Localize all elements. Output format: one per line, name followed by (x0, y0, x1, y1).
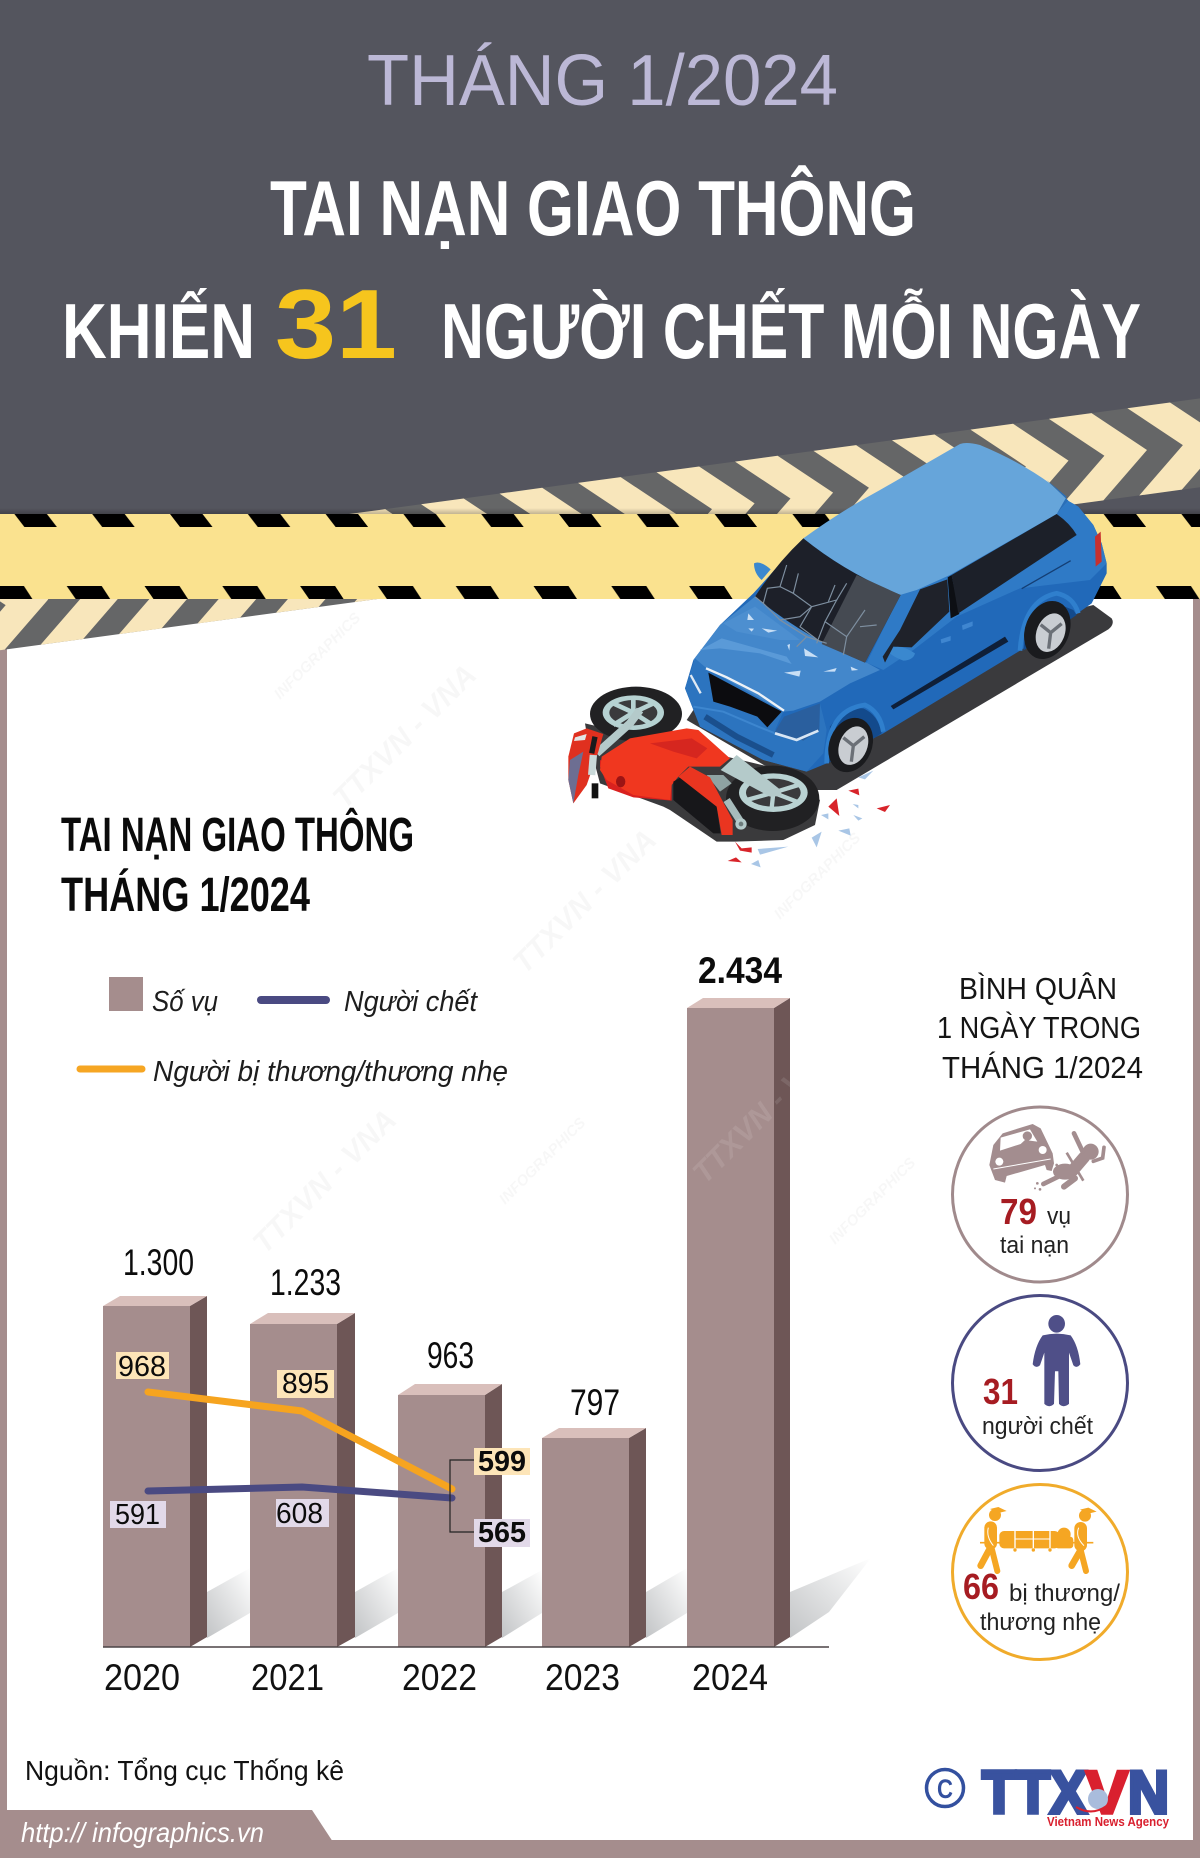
illustration: blue car (685, 443, 1113, 790)
bar value labels: 2.434 (698, 950, 782, 991)
stat circle: accidents: tai nạn (1000, 1232, 1069, 1259)
line data labels (110, 1351, 530, 1549)
year axis labels: 2024 (692, 1657, 768, 1698)
stat circle: accidents: vụ (1047, 1203, 1071, 1230)
footer tab (0, 1810, 333, 1842)
icon: stretcher (980, 1507, 1097, 1571)
source: Nguồn: Tổng cục Thống kê (25, 1755, 344, 1786)
faint watermarks: INFOGRAPHICS (496, 1114, 589, 1208)
faint watermarks (247, 609, 919, 1260)
header background (0, 0, 1200, 520)
faint watermarks: INFOGRAPHICS (826, 1154, 919, 1248)
chart title: TAI NẠN GIAO THÔNG (61, 807, 414, 862)
main title: line 2 (62, 269, 1141, 379)
bar shadows (207, 1558, 871, 1638)
icon: car hitting motorbike (989, 1124, 1104, 1191)
stat circle: accidents (952, 1107, 1128, 1282)
line data labels: 608 (276, 1498, 323, 1530)
year axis labels: 2022 (402, 1657, 477, 1698)
main title: line 2: KHIẾN (62, 287, 255, 375)
copyright mark (926, 1770, 964, 1806)
stat circle: deaths: 31 (983, 1371, 1018, 1412)
daily average heading: 1 NGÀY TRONG (937, 1010, 1141, 1045)
stat circle: deaths: người chết (982, 1413, 1093, 1440)
daily average heading: BÌNH QUÂN (959, 971, 1117, 1006)
bar 2022 (398, 1384, 502, 1647)
year axis labels: 2021 (251, 1657, 324, 1698)
illustration: fallen motorcycle and debris (568, 687, 890, 867)
stat circle: injured: thương nhẹ (980, 1609, 1101, 1636)
line data labels: 591 (115, 1499, 160, 1531)
logo TTXVN (982, 1759, 1169, 1829)
content panel frame (0, 590, 1200, 1858)
main title: line 2: 31 (275, 269, 397, 379)
legend (80, 977, 508, 1088)
faint watermarks: TTXVN - VNA (327, 658, 483, 815)
logo TTXVN: N (1128, 1759, 1169, 1826)
bar 2023 (542, 1428, 646, 1647)
year axis labels: 2020 (104, 1657, 180, 1698)
line data labels: 599 (478, 1446, 526, 1478)
line data labels: 565 (478, 1517, 526, 1549)
bar 2024: TTXVN - VNA (687, 1033, 843, 1190)
content panel white (7, 590, 1193, 1840)
legend: Số vụ (152, 986, 218, 1018)
bar 2021 (250, 1313, 355, 1647)
2022 connector (450, 1460, 474, 1532)
bar value labels: 1.300 (123, 1242, 194, 1283)
stat circle: accidents: 79 (1000, 1191, 1037, 1232)
year axis labels: 2023 (545, 1657, 620, 1698)
faint watermarks: TTXVN - VNA (507, 823, 663, 980)
faint watermarks: INFOGRAPHICS (771, 829, 864, 923)
bar value labels: 797 (570, 1382, 620, 1423)
logo TTXVN: Vietnam News Agency (1047, 1815, 1169, 1829)
legend: Người bị thương/thương nhẹ (153, 1056, 508, 1088)
warning tape band (0, 508, 1200, 599)
year axis labels (104, 1657, 768, 1698)
chart title: THÁNG 1/2024 (61, 868, 310, 922)
bar value labels: 963 (427, 1335, 474, 1376)
copyright mark: C (937, 1774, 953, 1804)
faint watermarks: TTXVN - VNA (247, 1103, 403, 1260)
line data labels: 968 (118, 1351, 166, 1383)
icon: person (1033, 1315, 1080, 1406)
daily average heading (937, 971, 1143, 1085)
line data labels: 895 (282, 1368, 329, 1400)
bar chart (103, 998, 871, 1647)
faint watermarks: INFOGRAPHICS (271, 609, 364, 703)
bar 2020 (103, 1296, 207, 1647)
line: deaths (148, 1487, 452, 1498)
stat circle: injured: bị thương/ (1009, 1580, 1120, 1607)
bar 2024 (687, 998, 843, 1647)
stat circle: injured: 66 (963, 1566, 999, 1607)
bar value labels (123, 950, 782, 1423)
daily average heading: THÁNG 1/2024 (942, 1050, 1143, 1085)
legend: Người chết (344, 986, 479, 1018)
chart title (61, 807, 414, 922)
stat circle: injured (952, 1484, 1128, 1660)
main title: line 1: TAI NẠN GIAO THÔNG (270, 164, 916, 252)
website url: http:// infographics.vn (21, 1817, 264, 1848)
logo TTXVN: TTX (982, 1759, 1087, 1826)
chevron road strip (0, 393, 1200, 666)
logo TTXVN: V (1086, 1759, 1128, 1826)
line: injured (148, 1392, 452, 1489)
bar value labels: 1.233 (270, 1262, 341, 1303)
main title: month: THÁNG 1/2024 (367, 41, 838, 121)
stat circle: deaths (952, 1296, 1128, 1470)
